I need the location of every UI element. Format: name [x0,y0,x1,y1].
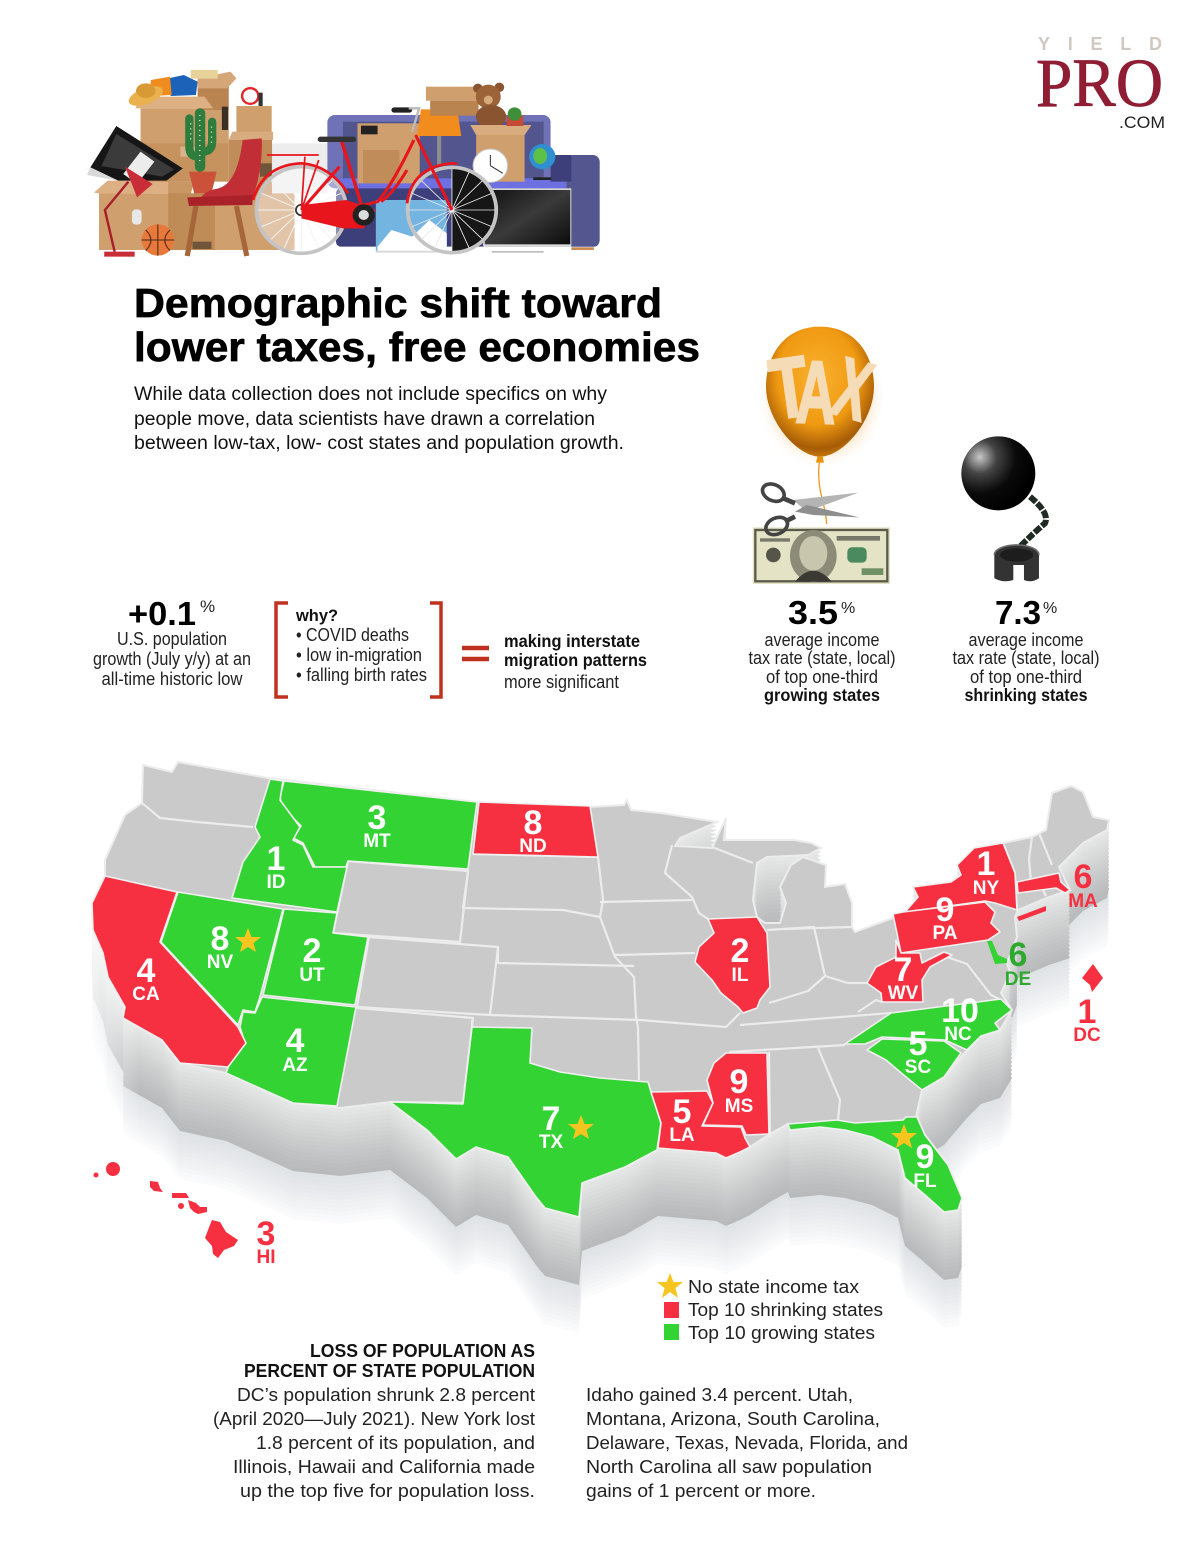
chain [1020,497,1046,547]
label: ID 1: 1 [267,840,285,878]
label: MA 6 [1068,858,1098,912]
label: UT 2: UT [299,965,325,986]
label: AZ 4: AZ [282,1055,308,1076]
stat: US population growth: all-time historic low [102,669,243,689]
label: LA 5: 5 [673,1093,691,1131]
label: CA 4 [132,952,160,1005]
label: DC 1 [1073,993,1101,1046]
ball [961,436,1035,510]
label: IL 2: 2 [731,932,749,970]
label: NC 10: NC [944,1024,972,1045]
stat: growing states tax rate [748,594,896,705]
balloon: A [795,341,838,443]
text: population gains: Montana, Arizona, South Carolina, [586,1408,880,1429]
label: DC 1: 1 [1078,993,1096,1031]
intro text: between low-tax, low- cost states and population growth. [134,433,624,454]
text: loss of population: 1.8 percent of its population, and [256,1432,535,1453]
label: ND 8 [519,804,547,857]
scissors [760,481,859,538]
bracket: why list: • COVID deaths [296,625,409,645]
logo: Yield Pro .com: PRO [1036,45,1163,121]
red chair [187,138,262,256]
label: ND 8: ND [519,836,547,857]
label: TX 7: 7 [542,1100,560,1138]
label: WV 7 [888,951,919,1004]
state: North Dakota [473,802,598,857]
intro text: people move, data scientists have drawn a correlation [134,409,595,430]
label: NV 8 [207,920,234,973]
shackle [994,545,1039,581]
label: SC 5: 5 [909,1025,927,1063]
logo: Yield Pro .com: .COM [1119,113,1165,132]
map: US population change by state [80,762,1109,1333]
state: Hawaii [94,1162,238,1258]
label: DE 6: DE [1005,969,1031,990]
label: FL 9: FL [913,1171,937,1192]
label: MA 6: 6 [1074,858,1092,896]
front wheel [408,167,496,253]
stat: US population growth: +0.1 [128,595,196,632]
stat: growing states tax rate: tax rate (state, local) [748,648,896,668]
cactus in pot [189,108,217,193]
state: North Carolina [845,999,1012,1050]
shrinking states (red) [92,802,1070,1158]
label: MS 9: MS [725,1096,753,1117]
legend: Top 10 shrinking states [688,1299,883,1320]
star: Nevada [235,928,261,952]
stat: growing states tax rate: of top one-third [766,667,878,687]
text: loss of population [213,1341,535,1501]
top box and teddy bear [426,83,506,128]
label: DE 6: 6 [1009,936,1027,974]
legend: Top 10 growing states [688,1322,875,1343]
label: ND 8: 8 [524,804,542,842]
sofa [327,115,600,250]
state: West Virginia [867,940,952,1002]
icon: tax balloon, scissors and dollar bill [753,327,890,584]
legend star [657,1273,683,1298]
stat: shrinking states tax rate: shrinking states [964,685,1088,705]
label: AZ 4 [282,1022,308,1076]
state: New York [905,843,1017,912]
left box stack [94,72,295,250]
stat: US population growth: U.S. population [117,629,227,649]
balloon [757,327,887,524]
orange lamp [417,109,461,166]
stat: US population growth [93,595,251,689]
stat: shrinking states tax rate: 7.3 [995,594,1041,631]
state borders [142,803,1052,1137]
label: NY 1 [973,845,1000,899]
shadow behind boxes [272,143,327,193]
gray states [92,762,1109,1217]
label: UT 2: 2 [303,932,321,970]
stat: shrinking states tax rate [952,594,1100,705]
stat: shrinking states tax rate: of top one-third [970,667,1082,687]
text: loss of population: PERCENT OF STATE POPULATION [244,1361,535,1381]
label: MT 3: MT [363,831,391,852]
text: making interstate migration patterns: migration patterns [504,650,647,670]
label: MS 9: 9 [730,1063,748,1101]
label: NC 10: 10 [941,992,979,1030]
stat: growing states tax rate: average income [764,630,880,650]
label: UT 2 [299,932,325,986]
intro text: While data collection does not include specifics on why [134,384,608,405]
small box with clock [470,107,532,182]
label: DE 6 [1005,936,1031,990]
label: WV 7: 7 [894,951,912,989]
state: Florida [788,1117,962,1212]
label: HI 3: 3 [257,1215,275,1253]
frame [301,135,452,210]
label: PA 9: PA [933,923,958,944]
text: population gains: Idaho gained 3.4 percent. Utah, [586,1384,853,1405]
title: lower taxes, free economies [134,324,700,370]
text: making interstate migration patterns: making interstate [504,631,640,651]
label: MA 6: MA [1068,891,1098,912]
stat: US population growth: growth (July y/y) at an [93,649,251,669]
label: MT 3: 3 [368,799,386,837]
basketball [142,224,174,256]
legend: No state income tax [688,1276,860,1297]
label: CA 4: CA [132,984,160,1005]
state: Nevada [161,892,283,1025]
stat: shrinking states tax rate: tax rate (state, local) [952,648,1100,668]
state: California [92,876,246,1067]
text: loss of population: up the top five for population loss. [240,1480,535,1501]
label: NV 8: 8 [211,920,229,958]
text: loss of population: Illinois, Hawaii and California made [233,1456,535,1477]
text: population gains: North Carolina all saw population [586,1456,872,1477]
stat: shrinking states tax rate: % [1043,600,1057,617]
label: TX 7: TX [539,1132,563,1153]
bracket: why list: why? [295,606,338,625]
label: NV 8: NV [207,952,234,973]
star: Florida [891,1124,917,1148]
globe [529,144,555,180]
bracket: why list: • falling birth rates [296,665,427,685]
text: population gains: gains of 1 percent or more. [586,1480,816,1501]
stat: growing states tax rate: % [841,600,855,617]
label: PA 9: 9 [936,891,954,929]
balloon: T [764,338,814,437]
star: Texas [568,1115,594,1139]
Long Island [1017,906,1046,921]
title [134,280,700,370]
label: DC 1: DC [1073,1025,1101,1046]
illustration: moving boxes, furniture and bicycle [87,70,600,257]
label: SC 5 [905,1025,931,1078]
bracket: why list [276,603,441,697]
box on sofa [357,123,420,183]
label: NY 1: NY [973,878,1000,899]
text: making interstate migration patterns: more significant [504,672,619,692]
icon: ball and chain [961,436,1046,581]
text: population gains [586,1384,908,1501]
map labels [132,799,1101,1268]
label: TX 7 [539,1100,563,1153]
label: WV 7: WV [888,983,919,1004]
text: loss of population: DC’s population shrunk 2.8 percent [237,1384,535,1405]
state: Massachusetts [1017,873,1070,893]
text: loss of population: (April 2020—July 2021). New York lost [213,1408,535,1429]
label: SC 5: SC [905,1057,931,1078]
logo: Yield Pro .com: YIELD [1038,34,1162,54]
map extrusion shadow [80,766,1109,1333]
equals sign [462,648,489,659]
label: LA 5: LA [669,1125,695,1146]
label: AZ 4: 4 [286,1022,305,1060]
label: IL 2: IL [732,965,749,986]
mouse [132,209,142,225]
bicycle [253,108,496,253]
text: loss of population: LOSS OF POPULATION AS [310,1341,535,1361]
back wheel [256,167,346,253]
label: HI 3: HI [256,1247,276,1268]
label: ID 1: ID [266,872,286,893]
state: Mississippi [703,1053,769,1135]
state: Illinois [695,917,770,1013]
dollar bill [753,527,890,584]
label: MS 9 [725,1063,753,1117]
text: making interstate migration patterns [504,631,647,692]
text: population gains: Delaware, Texas, Nevada, Florida, and [586,1432,908,1453]
clothes and hat [126,70,218,110]
state: Pennsylvania [893,902,1000,953]
label: FL 9: 9 [916,1138,934,1176]
state: Washington DC [1082,964,1103,992]
title: Demographic shift toward [134,280,662,326]
monitor [87,126,183,184]
alarm clock [241,87,263,106]
stat: growing states tax rate: growing states [764,685,880,705]
state: Montana [280,781,477,869]
state: Arizona [226,997,356,1106]
label: LA 5 [669,1093,695,1146]
balloon: X [824,340,882,439]
intro text [134,384,624,454]
label: NY 1: 1 [977,845,995,883]
legend [657,1273,883,1343]
picture frame with mountains [376,200,447,253]
label: FL 9 [913,1138,937,1192]
stat: shrinking states tax rate: average income [968,630,1084,650]
label: PA 9 [933,891,958,944]
state: Utah [263,909,368,1005]
state: Louisiana [651,1091,750,1158]
state: South Carolina [867,1039,961,1090]
label: CA 4: 4 [137,952,156,990]
state: Delaware [987,941,1007,964]
desk lamp [104,167,153,257]
state: Texas [390,1027,661,1217]
state: Idaho [232,779,347,912]
stat: US population growth: % [200,597,215,616]
growing states (green) [161,779,1012,1217]
label: MT 3 [363,799,391,852]
stat: growing states tax rate: 3.5 [788,594,838,631]
television [483,188,571,253]
bracket: why list: • low in-migration [296,645,422,665]
